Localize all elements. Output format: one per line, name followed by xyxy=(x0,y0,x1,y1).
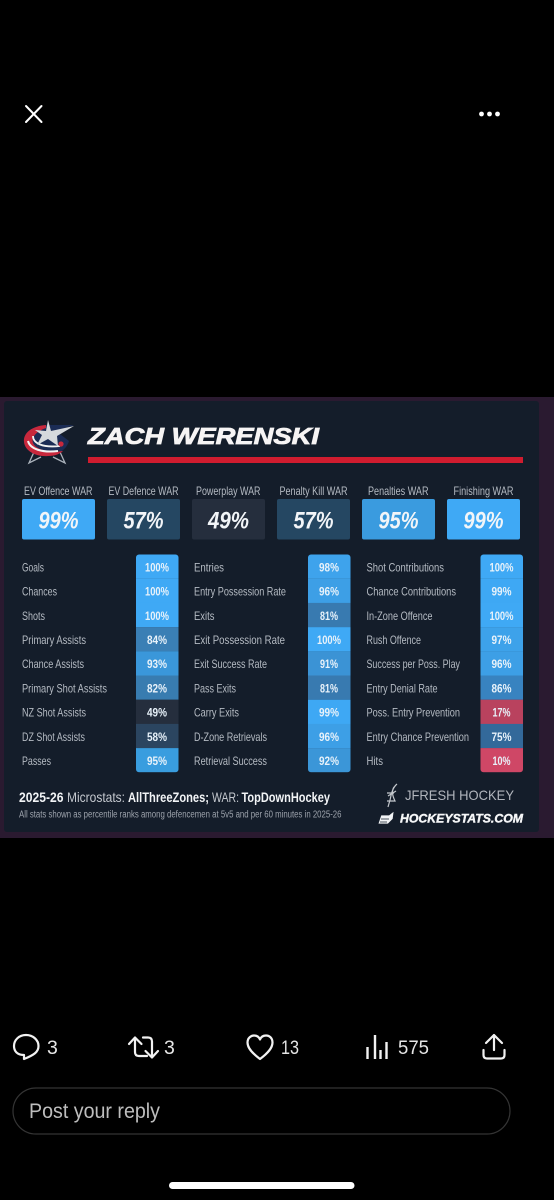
column 1 values: 100% xyxy=(145,560,169,574)
action bar xyxy=(14,1035,504,1059)
column 3 values: 100% xyxy=(490,609,514,623)
column 2 labels: Pass Exits xyxy=(194,681,236,695)
column 3 values: 96% xyxy=(492,657,512,671)
column 1 labels: Primary Assists xyxy=(22,633,86,647)
icon: HockeyStats logo xyxy=(378,811,394,824)
column 2 values: 96% xyxy=(319,585,339,599)
column 3 values: 10% xyxy=(492,754,511,768)
column 1 labels: Primary Shot Assists xyxy=(22,681,107,695)
column 1 labels: Goals xyxy=(22,560,44,574)
stat column 1: production and assists xyxy=(22,554,178,772)
column 3 labels: Hits xyxy=(366,754,383,768)
WAR: Penalty Kill: 57% xyxy=(294,508,334,534)
column 2 labels: Entries xyxy=(194,560,224,574)
column 1 labels: Shots xyxy=(22,609,45,623)
home indicator xyxy=(169,1182,354,1189)
WAR: EV Defence: EV Defence WAR xyxy=(108,484,178,498)
column 3 values: 100% xyxy=(490,560,514,574)
source line: TopDownHockey xyxy=(242,789,330,805)
icon: more options xyxy=(479,112,500,116)
title underline xyxy=(88,457,523,463)
column 1 labels: Chances xyxy=(22,585,57,599)
views xyxy=(368,1035,429,1059)
column 2 values: 92% xyxy=(319,754,339,768)
source line: WAR: xyxy=(212,789,239,805)
column 1 values: 100% xyxy=(145,609,169,623)
column 3 percentile bars xyxy=(480,554,523,772)
column 1 values xyxy=(145,560,169,768)
replies: 3 xyxy=(47,1037,58,1059)
WAR: Finishing xyxy=(447,484,520,540)
column 2 values: 91% xyxy=(320,657,338,671)
column 3 values: 86% xyxy=(492,681,512,695)
column 2 values: 96% xyxy=(319,730,339,744)
source line: 2025-26 xyxy=(19,789,64,805)
column 2 labels: Entry Possession Rate xyxy=(194,585,286,599)
WAR: Penalty Kill: Penalty Kill WAR xyxy=(280,484,348,498)
column 2 values: 100% xyxy=(317,633,341,647)
column 1 values: 100% xyxy=(145,585,169,599)
title: ZACH WERENSKI xyxy=(87,423,320,449)
source line xyxy=(19,789,330,805)
WAR: EV Offence: 99% xyxy=(38,508,78,534)
column 3 labels: Entry Chance Prevention xyxy=(366,730,469,744)
column 3 labels: In-Zone Offence xyxy=(366,609,433,623)
stat column 3: contributions and defence xyxy=(366,554,523,772)
column 3 values xyxy=(490,560,514,768)
footnote: All stats shown as percentile ranks among defencemen at 5v5 and per 60 minutes in 2025-26 xyxy=(19,810,342,820)
stats card xyxy=(0,397,554,838)
icon: Blue Jackets logo xyxy=(24,420,74,463)
column 1 labels: Passes xyxy=(22,754,51,768)
column 1 labels: DZ Shot Assists xyxy=(22,730,85,744)
column 3 values: 97% xyxy=(492,633,512,647)
column 1 values: 49% xyxy=(147,706,167,720)
WAR: Finishing: 99% xyxy=(464,508,504,534)
column 3 labels: Success per Poss. Play xyxy=(366,657,460,671)
WAR: Powerplay xyxy=(192,484,265,540)
WAR: EV Defence: 57% xyxy=(124,508,164,534)
stat column 2: transition and retrievals xyxy=(194,554,350,772)
JFresh Hockey brand: JFRESH HOCKEY xyxy=(405,787,515,803)
WAR: EV Offence xyxy=(22,484,95,540)
column 3 labels: Entry Denial Rate xyxy=(366,681,438,695)
column 3 values: 75% xyxy=(492,730,512,744)
WAR: Penalties xyxy=(362,484,435,540)
column 1 values: 58% xyxy=(147,730,167,744)
column 2 labels: Retrieval Success xyxy=(194,754,267,768)
column 1 labels: NZ Shot Assists xyxy=(22,706,86,720)
WAR: Penalty Kill xyxy=(277,484,350,540)
likes xyxy=(248,1036,299,1059)
column 2 percentile bars xyxy=(308,554,350,772)
column 2 labels: Exit Possession Rate xyxy=(194,633,285,647)
source line: AllThreeZones; xyxy=(128,789,209,805)
column 2 labels: Exit Success Rate xyxy=(194,657,267,671)
column 2 values: 99% xyxy=(319,706,339,720)
column 3 labels: Rush Offence xyxy=(366,633,421,647)
column 2 values xyxy=(317,560,341,768)
column 1 values: 95% xyxy=(147,754,167,768)
reply box: Post your reply xyxy=(29,1100,160,1123)
icon: JFresh signature xyxy=(387,784,397,807)
WAR: EV Offence: EV Offence WAR xyxy=(24,484,92,498)
WAR: Powerplay: Powerplay WAR xyxy=(196,484,260,498)
source line: Microstats: xyxy=(67,789,125,805)
column 2 labels: Exits xyxy=(194,609,215,623)
column 2 values: 81% xyxy=(320,609,338,623)
column 2 labels xyxy=(194,560,286,768)
WAR: Finishing: Finishing WAR xyxy=(454,484,514,498)
column 1 values: 82% xyxy=(147,681,167,695)
column 1 labels xyxy=(22,560,107,768)
column 3 labels xyxy=(366,560,469,768)
WAR: EV Defence xyxy=(107,484,180,540)
column 3 labels: Poss. Entry Prevention xyxy=(366,706,460,720)
column 2 values: 98% xyxy=(319,560,339,574)
views: 575 xyxy=(398,1037,429,1059)
reposts xyxy=(129,1037,175,1059)
column 3 values: 99% xyxy=(492,585,512,599)
icon: share xyxy=(484,1035,504,1058)
WAR: Penalties: Penalties WAR xyxy=(368,484,428,498)
HockeyStats brand: HOCKEYSTATS.COM xyxy=(400,812,524,826)
column 3 labels: Chance Contributions xyxy=(366,585,456,599)
reposts: 3 xyxy=(164,1037,175,1059)
column 2 values: 81% xyxy=(320,681,338,695)
column 2 labels: Carry Exits xyxy=(194,706,239,720)
likes: 13 xyxy=(281,1037,299,1059)
WAR: Penalties: 95% xyxy=(378,508,418,534)
column 1 values: 84% xyxy=(147,633,167,647)
column 3 values: 17% xyxy=(492,706,511,720)
replies xyxy=(14,1035,58,1059)
column 1 labels: Chance Assists xyxy=(22,657,84,671)
column 1 values: 93% xyxy=(147,657,167,671)
column 3 labels: Shot Contributions xyxy=(366,560,444,574)
column 2 labels: D-Zone Retrievals xyxy=(194,730,267,744)
reply box xyxy=(13,1088,510,1134)
icon: close xyxy=(26,106,42,122)
column 1 percentile bars xyxy=(136,554,178,772)
WAR: Powerplay: 49% xyxy=(207,508,249,534)
